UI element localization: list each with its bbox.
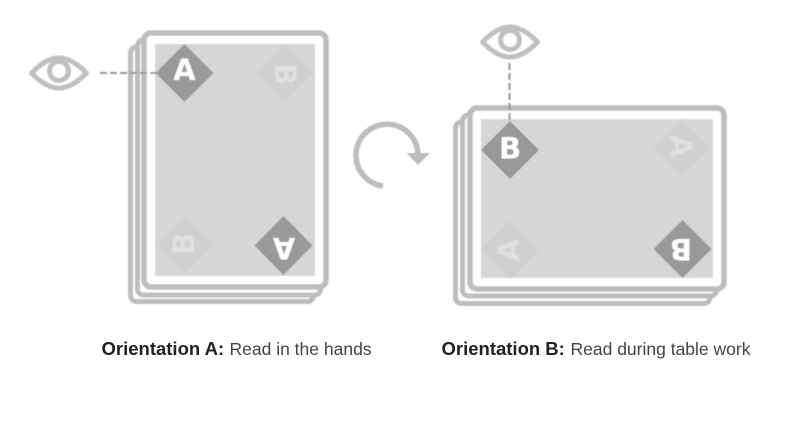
- caption: orientation B: Orientation B:: [442, 338, 570, 359]
- diamond: faint A top right: [653, 119, 711, 177]
- panel: orientation B: [456, 27, 724, 304]
- diamond: A bottom right: A: [272, 231, 295, 265]
- diamond: faint A top right: A: [664, 135, 698, 158]
- dashed sight line A: [100, 72, 157, 74]
- diamond: faint B bottom left: [156, 216, 214, 274]
- caption: orientation B: Read during table work: [570, 339, 751, 359]
- diamond: B top left: [481, 121, 539, 179]
- diamond: A bottom right: [254, 216, 312, 275]
- diamond: faint B bottom left: B: [167, 233, 201, 255]
- icon: eye left: [32, 58, 86, 88]
- icon: rotate clockwise arrow: [356, 124, 430, 186]
- card stack, landscape: [456, 108, 724, 304]
- icon: eye top: [482, 27, 538, 57]
- diamond: B bottom right: [654, 220, 712, 278]
- diamond: faint A bottom left: A: [492, 238, 526, 261]
- dashed sight line B: [508, 63, 510, 121]
- caption: orientation A: Orientation A:: [102, 338, 229, 359]
- diamond: faint B top right: B: [268, 63, 302, 85]
- diamond: A top left: A: [173, 53, 196, 87]
- caption: orientation A: Read in the hands: [230, 339, 372, 359]
- diamond: faint B top right: [256, 44, 314, 102]
- diamond: A top left: [156, 44, 214, 102]
- diamond: B bottom right: B: [670, 232, 692, 266]
- panel: orientation A: [32, 33, 326, 302]
- card stack, portrait: [130, 33, 326, 302]
- diamond: B top left: B: [499, 132, 521, 166]
- diamond: faint A bottom left: [481, 221, 539, 279]
